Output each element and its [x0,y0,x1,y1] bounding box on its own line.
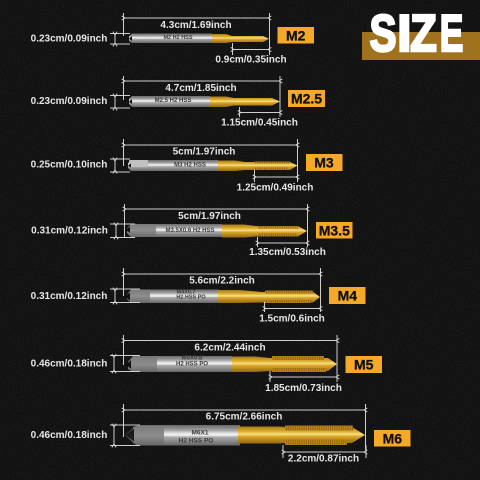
tap: M3.5 [126,224,307,238]
size label: M6 [374,430,410,446]
dimensions: M2.5: 0.23cm/0.09inch [31,96,107,107]
size label: M3.5: M3.5 [319,222,350,238]
size label: M4: M4 [338,288,357,304]
dimensions: M3.5: 1.35cm/0.53inch [249,247,326,258]
title: SIZE [362,4,480,63]
size label: M3 [306,154,342,171]
dimensions: M3: 5cm/1.97inch [173,146,235,158]
title: SIZE: S [369,4,397,62]
tap row: M3 [31,139,342,194]
dimensions: M2.5: 4.7cm/1.85inch [165,83,237,94]
dimensions: M2: 4.3cm/1.69inch [160,20,232,31]
tap: M3: M3 H2 HSS [174,162,206,168]
tap: M6: H2 HSS PO [179,438,213,444]
tap: M3 [128,160,298,171]
tap row: M2 [31,13,314,66]
size label: M2: M2 [286,28,306,44]
dimensions: M5: 6.2cm/2.44inch [194,342,266,354]
dimensions: M4: 5.6cm/2.2inch [189,276,255,286]
tap row: M5 [31,335,382,394]
size label: M6: M6 [383,430,402,446]
dimensions: M3.5: 0.31cm/0.12inch [31,226,108,236]
dimensions: M2: 0.23cm/0.09inch [31,34,107,44]
tap: M5 [126,356,337,372]
dimensions: M4 [31,268,325,324]
dimensions: M5: 0.46cm/0.18inch [31,358,107,370]
dimensions: M3.5: 5cm/1.97inch [178,211,241,222]
tap row: M3.5 [31,204,352,258]
tap row: M4 [31,268,366,324]
title: SIZE: Z [410,6,437,63]
tap: M2.5 [129,96,280,107]
size label: M2 [278,27,314,44]
dimensions: M2.5: 1.15cm/0.45inch [221,118,298,128]
tap row: M6 [31,404,410,464]
dimensions: M4: 0.31cm/0.12inch [31,291,107,302]
dimensions: M3.5 [31,204,326,258]
tap: M6 [125,425,365,446]
size label: M4 [329,287,366,304]
title: SIZE: E [440,5,463,63]
dimensions: M3: 0.25cm/0.10inch [31,160,107,170]
dimensions: M5: 1.85cm/0.73inch [265,383,342,394]
tap: M4: M4X0.7 [177,290,195,296]
dimensions: M2 [31,13,287,66]
tap: M3.5: M3.5X0.6 H2 HSS [165,228,215,234]
tap row: M2.5 [31,76,325,128]
tap: M2.5: M2.5 H2 HSS [155,98,191,104]
dimensions: M6: 2.2cm/0.87inch [288,454,359,464]
tap: M6: M6X1 [192,430,209,436]
title: SIZE: I [397,5,412,63]
tap: M2 [129,34,269,43]
tap: M5: M5X0.8 [182,356,203,362]
dimensions: M6: 6.75cm/2.66inch [206,412,282,422]
tap: M2: M2 H2 HSS [163,35,193,41]
dimensions: M4: 1.5cm/0.6inch [259,314,325,324]
tap: M4 [125,290,320,303]
tap: M4: H2 HSS PO [176,294,206,300]
size label: M2.5: M2.5 [291,90,322,106]
dimensions: M2.5 [31,76,298,128]
dimensions: M6: 0.46cm/0.18inch [31,430,107,441]
tap: M5: H2 HSS PO [176,362,208,368]
dimensions: M3: 1.25cm/0.49inch [237,182,313,194]
size label: M5: M5 [354,356,374,372]
dimensions: M2: 0.9cm/0.35inch [215,54,287,66]
size label: M5 [346,356,382,373]
size label: M3: M3 [314,154,334,170]
dimensions: M5 [31,335,342,394]
dimensions: M6 [31,404,366,464]
dimensions: M3 [31,139,313,194]
